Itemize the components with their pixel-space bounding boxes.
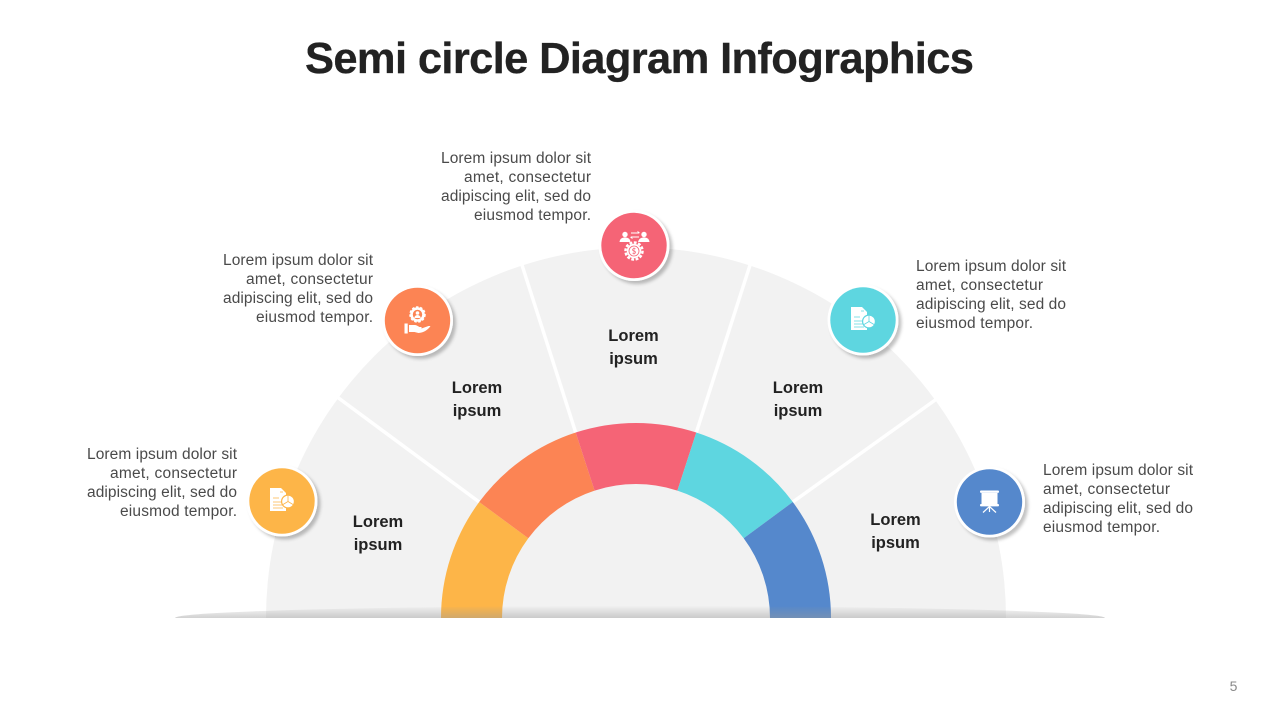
ring segment: orange xyxy=(479,432,595,538)
segment label 4: Lorem xyxy=(773,379,823,397)
segment label 2: Lorem xyxy=(452,379,502,397)
segment label 5: Lorem xyxy=(870,511,921,529)
segment label 5 xyxy=(870,511,921,552)
text block: orange: eiusmod tempor. xyxy=(256,309,373,326)
text block: teal xyxy=(916,258,1067,332)
text block: yellow: Lorem ipsum dolor sit xyxy=(87,446,238,463)
text block: orange: adipiscing elit, sed do xyxy=(223,290,373,307)
ring segment: teal xyxy=(677,432,793,538)
text block: orange: amet, consectetur xyxy=(246,271,373,288)
text block: teal: amet, consectetur xyxy=(916,277,1043,294)
text block: pink: amet, consectetur xyxy=(464,169,591,186)
segment label 4: ipsum xyxy=(774,402,822,420)
text block: orange xyxy=(223,252,374,326)
panel: grey semicircle background xyxy=(266,248,1006,618)
title: Semi circle Diagram Infographics xyxy=(305,35,974,83)
text block: pink: eiusmod tempor. xyxy=(474,207,591,224)
text block: teal: adipiscing elit, sed do xyxy=(916,296,1066,313)
segment label 1 xyxy=(353,513,403,554)
text block: blue: adipiscing elit, sed do xyxy=(1043,500,1193,517)
icon badge: orange hand with gear xyxy=(382,285,453,356)
text block: blue: Lorem ipsum dolor sit xyxy=(1043,462,1194,479)
text block: blue xyxy=(1043,462,1194,536)
segment label 1: Lorem xyxy=(353,513,403,531)
segment label 5: ipsum xyxy=(871,534,920,552)
panel dividers xyxy=(336,262,938,502)
text block: blue: eiusmod tempor. xyxy=(1043,519,1160,536)
page number: 5 xyxy=(1230,678,1238,694)
text block: blue: amet, consectetur xyxy=(1043,481,1170,498)
text block: yellow: amet, consectetur xyxy=(110,465,237,482)
segment label 2 xyxy=(452,379,502,420)
text block: orange: Lorem ipsum dolor sit xyxy=(223,252,374,269)
ring segment: pink xyxy=(576,423,696,491)
segment label 3: ipsum xyxy=(609,350,658,368)
text block: teal: eiusmod tempor. xyxy=(916,315,1033,332)
text block: pink xyxy=(441,150,592,224)
segment label 3: Lorem xyxy=(608,327,659,345)
segment label 1: ipsum xyxy=(354,536,402,554)
semicircle diagram xyxy=(175,248,1105,618)
segment label 2: ipsum xyxy=(453,402,501,420)
segment label 4 xyxy=(773,379,823,420)
icon badge: teal report xyxy=(828,284,898,356)
text block: yellow: adipiscing elit, sed do xyxy=(87,484,237,501)
text block: yellow: eiusmod tempor. xyxy=(120,503,237,520)
icon badge: yellow report xyxy=(246,466,318,536)
text block: teal: Lorem ipsum dolor sit xyxy=(916,258,1067,275)
text block: yellow xyxy=(87,446,238,520)
ground shadow xyxy=(175,606,1105,618)
icon badge: blue presentation board xyxy=(954,466,1025,538)
segment label 3 xyxy=(608,327,659,368)
ring segment: blue xyxy=(744,502,831,618)
text block: pink: adipiscing elit, sed do xyxy=(441,188,591,205)
ring segment: yellow xyxy=(441,502,528,618)
text block: pink: Lorem ipsum dolor sit xyxy=(441,150,592,167)
icon badge: pink team and money gear xyxy=(598,210,670,281)
